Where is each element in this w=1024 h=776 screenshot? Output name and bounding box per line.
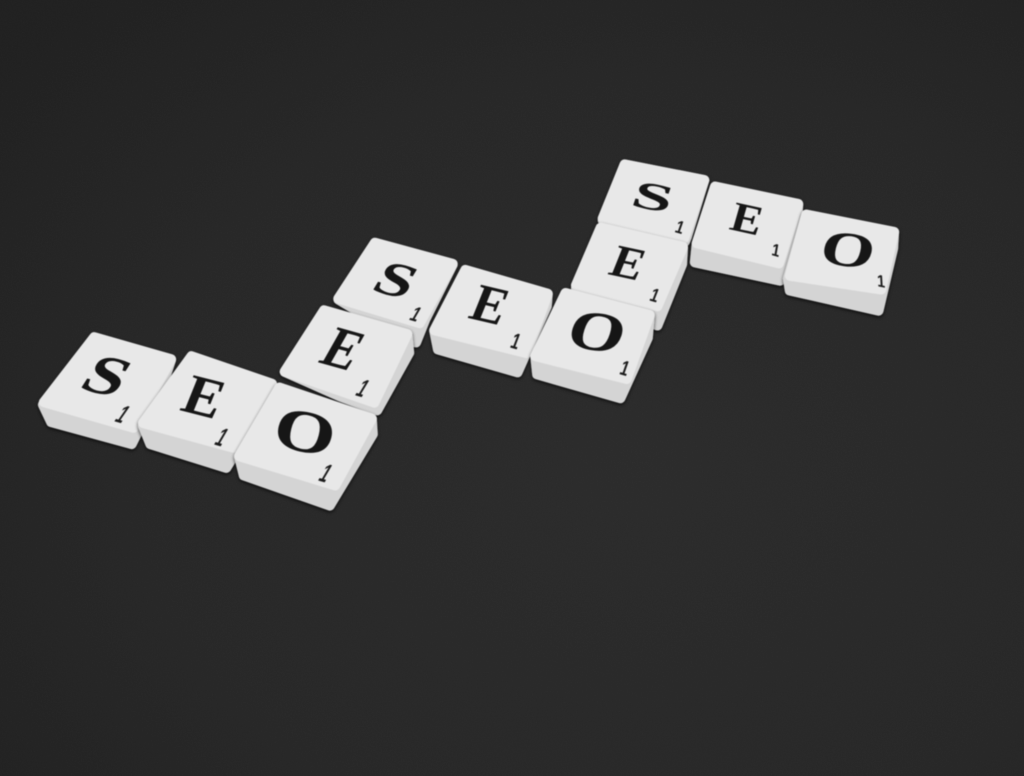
tile: S of middle word: S — [363, 251, 429, 309]
tile: S of top word — [603, 164, 704, 241]
tile: E of top word — [695, 187, 798, 281]
tile: S of top word: S — [626, 172, 680, 221]
tile: E of first word: E — [174, 363, 234, 431]
tile: E of top vertical word: E — [603, 236, 653, 291]
tile: O of first word — [239, 388, 373, 506]
tile: E of middle vertical word: 1 — [351, 374, 375, 402]
tile: O of middle word — [535, 293, 650, 398]
tile: S of first word: S — [70, 343, 144, 409]
tile: O of top word: O — [815, 219, 881, 280]
tile: E of middle word — [434, 270, 548, 372]
tile: O of middle word: 1 — [617, 356, 633, 381]
tile: E of top word: 1 — [770, 241, 781, 261]
tile: E of top word: E — [725, 193, 768, 245]
tile: E of middle word: E — [462, 273, 518, 337]
tile: E of middle vertical word — [285, 310, 409, 410]
tile: E of middle vertical word: E — [310, 315, 376, 383]
tile: O of top word — [788, 214, 894, 311]
tile: O of first word: 1 — [314, 459, 338, 488]
tile: E of first word: 1 — [210, 423, 234, 452]
tile: S of first word — [43, 337, 171, 444]
tile: S of middle word — [338, 243, 453, 342]
tile: O of first word: O — [267, 394, 343, 471]
tile: S of middle word: 1 — [406, 302, 426, 326]
tile: O of top word: 1 — [877, 272, 886, 292]
tile: O of middle word: O — [560, 298, 634, 367]
tile group: all SEO tiles — [43, 164, 894, 506]
tile: S of first word: 1 — [110, 400, 136, 428]
tile: E of middle word: 1 — [507, 329, 524, 355]
tile: S of top word: 1 — [673, 217, 687, 238]
tile: E of top vertical word — [576, 228, 683, 325]
tile: E of top vertical word: 1 — [647, 284, 663, 307]
tile: E of first word — [143, 356, 272, 468]
